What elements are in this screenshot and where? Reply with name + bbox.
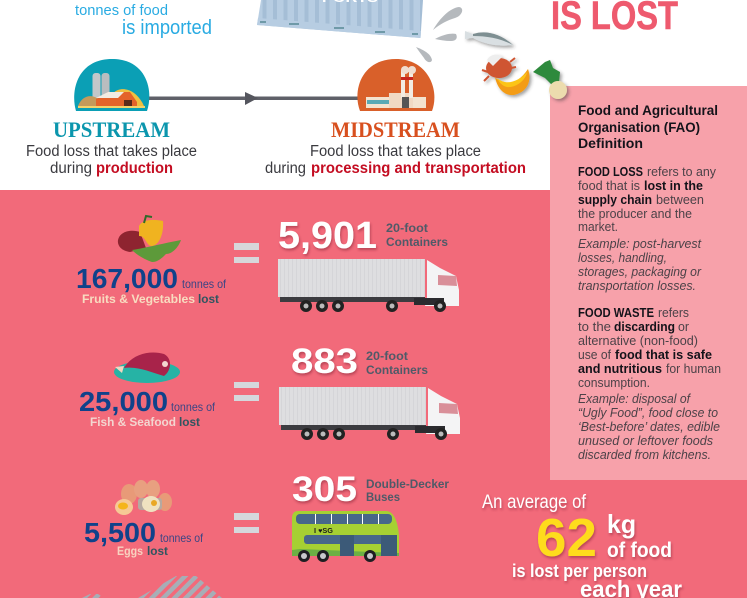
stat: 5,901 containers: 20-foot [386,221,428,235]
stat: fish and seafood [79,386,216,429]
stat: 5,901 containers [278,215,448,257]
icon: bananas [495,69,529,95]
heading: upstream: UPSTREAM [53,117,170,142]
stat: fruits and vegetables: Fruits & Vegetables [82,292,195,306]
stat: eggs [84,517,204,558]
food waste definition: use of [578,348,612,362]
heading: midstream: MIDSTREAM [331,117,460,142]
panel: FAO definition [550,86,747,480]
imported text: tonnes of food [75,2,168,19]
panel heading: Food and Agricultural [578,102,718,118]
equals sign 2 [234,382,259,401]
stat: fruits and vegetables: tonnes of [182,277,227,291]
food waste definition: to the [578,320,611,334]
food waste example: discarded from kitchens. [578,448,711,462]
stat: 883 containers: 20-foot [366,349,408,363]
icon: crab [482,55,516,81]
imported text [75,2,212,39]
midstream description [265,143,526,177]
food waste definition: discarding [614,320,675,334]
stat: 883 containers: Containers [366,363,428,377]
icon: rotten fish [114,353,180,383]
food loss definition: lost in the [644,179,703,193]
food waste definition: food that is safe [615,348,712,362]
icon: double-decker bus: I ♥SG [314,528,334,535]
upstream description [26,143,197,177]
callout: 62 kg per person: 62 [536,508,597,568]
stat: 305 buses: 305 [292,470,357,509]
food waste example: ‘Best-before’ dates, edible [578,420,720,434]
truck 1 [278,259,459,312]
icon: splash drops [416,7,462,62]
stat: fruits and vegetables: lost [198,292,219,306]
midstream description: during [265,160,306,177]
icon: farm [74,59,149,111]
panel heading: Organisation (FAO) [578,119,700,135]
stat: fruits and vegetables: 167,000 [76,263,178,294]
food loss definition: supply chain [578,193,652,207]
stat: 5,901 containers: Containers [386,235,448,249]
stat: 5,901 containers: 5,901 [278,215,377,257]
stat: fish and seafood: tonnes of [171,400,216,414]
food waste example: unused or leftover foods [578,434,713,448]
food loss definition [578,165,717,234]
food waste definition: and nutritious [578,362,662,376]
stat: fruits and vegetables [76,263,227,306]
callout: 62 kg per person: An average of [482,492,587,513]
food waste definition: for human [666,362,721,376]
stat: fish and seafood: Fish & Seafood [90,415,176,429]
callout: 62 kg per person: of food [607,539,672,562]
icon: rotten fruits and vegetables [118,216,181,262]
equals sign 3 [234,513,259,533]
food loss example: storages, packaging or [578,265,702,279]
upstream description: Food loss that takes place [26,143,197,160]
food waste definition [578,306,721,390]
stat: eggs: 5,500 [84,517,156,548]
icon: double-decker bus [292,511,399,562]
food waste definition: alternative (non-food) [578,334,698,348]
food loss example: losses, handling, [578,251,667,265]
imported text: is imported [122,17,212,39]
stat: fish and seafood: 25,000 [79,386,168,417]
food waste definition: refers [658,306,689,320]
stat: 883 containers [291,342,428,381]
callout: 62 kg per person: is lost per person [512,561,647,581]
panel heading [578,102,718,151]
food waste example [578,392,720,462]
food loss definition: food that is [578,179,640,193]
food waste definition: or [678,320,689,334]
pink background section [0,190,747,598]
icon: vegetable [533,60,567,99]
equals sign 1 [234,243,259,263]
shipping container [257,0,423,38]
food waste example: Example: disposal of [578,392,691,406]
stat: 305 buses: Buses [366,490,400,504]
stat: 305 buses [292,470,449,509]
panel heading: Definition [578,135,643,151]
stat: 305 buses: Double-Decker [366,477,449,491]
stat: 883 containers: 883 [291,342,358,381]
food loss example: transportation losses. [578,279,696,293]
hatched shape at bottom [82,576,222,598]
stat: fish and seafood: lost [179,415,200,429]
callout: 62 kg per person [482,492,682,598]
food loss definition: FOOD LOSS [578,165,643,179]
midstream description: Food loss that takes place [310,143,481,160]
food loss definition: refers to any [647,165,717,179]
arrow: upstream to midstream [148,92,360,105]
stat: eggs: Eggs [117,544,143,558]
food loss definition: the producer and the [578,207,692,221]
icon: fish [465,31,513,46]
food loss example: Example: post-harvest [578,237,702,251]
upstream description: during [50,160,92,177]
stat: eggs: tonnes of [160,531,204,545]
food waste example: “Ugly Food”, food close to [578,406,718,420]
food loss example [578,237,702,293]
icon: rotten eggs [115,480,172,515]
food loss definition: market. [578,220,618,234]
stat: eggs: lost [147,544,168,558]
food waste definition: consumption. [578,376,650,390]
truck 2 [279,387,460,440]
midstream description: processing and transportation [311,160,526,177]
upstream description: production [96,160,173,177]
icon: factory [357,59,434,111]
food loss definition: between [656,193,704,207]
food waste definition: FOOD WASTE [578,306,654,320]
callout: 62 kg per person: kg [607,509,636,539]
